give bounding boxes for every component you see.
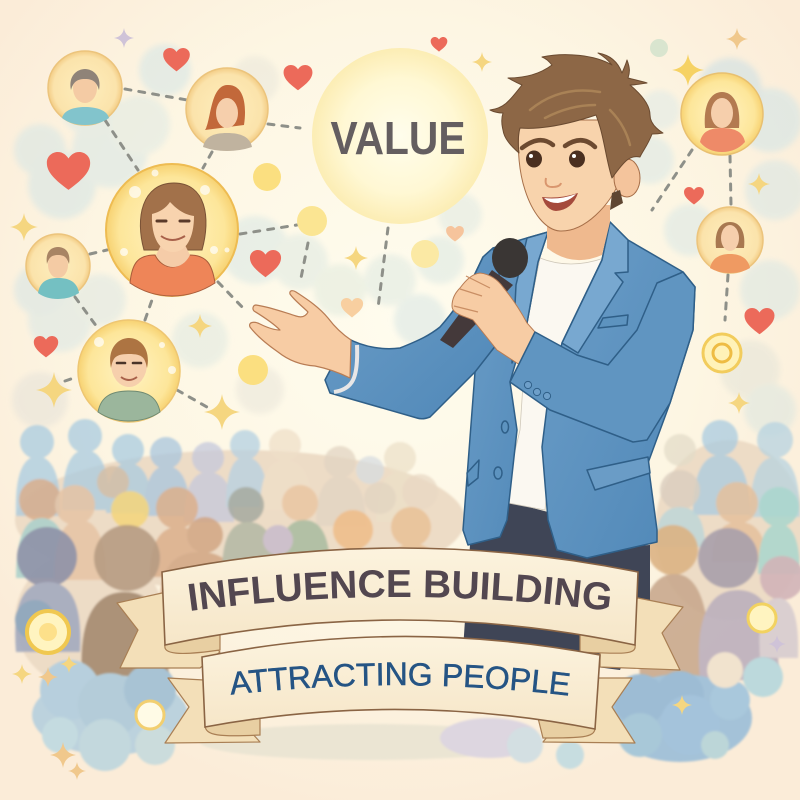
hand on mic — [452, 273, 535, 367]
banner ribbon — [202, 636, 600, 729]
t-shirt — [503, 258, 604, 510]
person bubble: right woman — [697, 207, 763, 273]
jacket — [325, 222, 695, 558]
icon: glowing coins — [253, 163, 281, 191]
eyebrows — [522, 140, 595, 148]
network dashed connectors — [65, 89, 731, 407]
microphone — [440, 238, 528, 348]
finger lines — [454, 276, 490, 312]
left pocket — [467, 460, 479, 486]
nose — [546, 178, 561, 187]
banner folds — [205, 715, 595, 738]
crowd wash — [15, 440, 800, 690]
banner: attracting people — [164, 636, 636, 744]
head — [518, 120, 625, 231]
right sleeve — [510, 272, 695, 442]
person bubble: large woman — [106, 164, 238, 296]
shirt cuff — [334, 345, 357, 392]
bottom clouds — [32, 652, 783, 771]
value circle — [312, 48, 488, 224]
speaker — [250, 53, 695, 670]
crowd silhouettes — [15, 419, 800, 690]
neck — [547, 205, 610, 260]
jacket right panel — [542, 222, 695, 558]
hair highlights — [530, 90, 630, 145]
person bubble: left man — [26, 234, 90, 299]
cuff buttons — [524, 381, 551, 400]
breast pocket — [598, 315, 628, 328]
person bubble: top left man — [48, 51, 122, 125]
decorative clouds — [12, 44, 800, 436]
hair — [490, 53, 663, 178]
person bubble: lower man — [78, 320, 180, 422]
banner ribbon — [162, 548, 638, 645]
banner tails — [165, 678, 635, 743]
trousers — [463, 500, 650, 670]
person bubble: top woman — [186, 68, 268, 151]
hair tuft — [610, 190, 623, 210]
left lapel — [512, 232, 548, 363]
jacket left panel — [463, 232, 548, 545]
right lapel — [562, 222, 628, 353]
crowd back row — [16, 419, 800, 526]
eyes — [526, 150, 585, 168]
banner: influence building — [116, 547, 684, 671]
crowd front row — [15, 525, 800, 682]
extended hand — [250, 291, 351, 378]
lower pocket — [587, 457, 650, 490]
banner title: INFLUENCE BUILDING — [188, 570, 610, 611]
left sleeve — [325, 248, 505, 419]
eye highlights — [529, 154, 576, 158]
value label: VALUE — [330, 112, 466, 164]
icon: stars — [10, 52, 770, 715]
ear — [614, 159, 640, 197]
banner folds — [165, 632, 635, 653]
mouth — [542, 193, 578, 211]
teeth — [544, 194, 576, 203]
banner tails — [117, 593, 683, 670]
jacket buttons — [494, 421, 508, 479]
banner subtitle: ATTRACTING PEOPLE — [230, 662, 570, 696]
icon: star on bubble — [672, 54, 704, 86]
person bubble: top right woman — [681, 73, 763, 155]
crowd middle row — [16, 466, 800, 602]
icon: hearts — [34, 37, 775, 357]
